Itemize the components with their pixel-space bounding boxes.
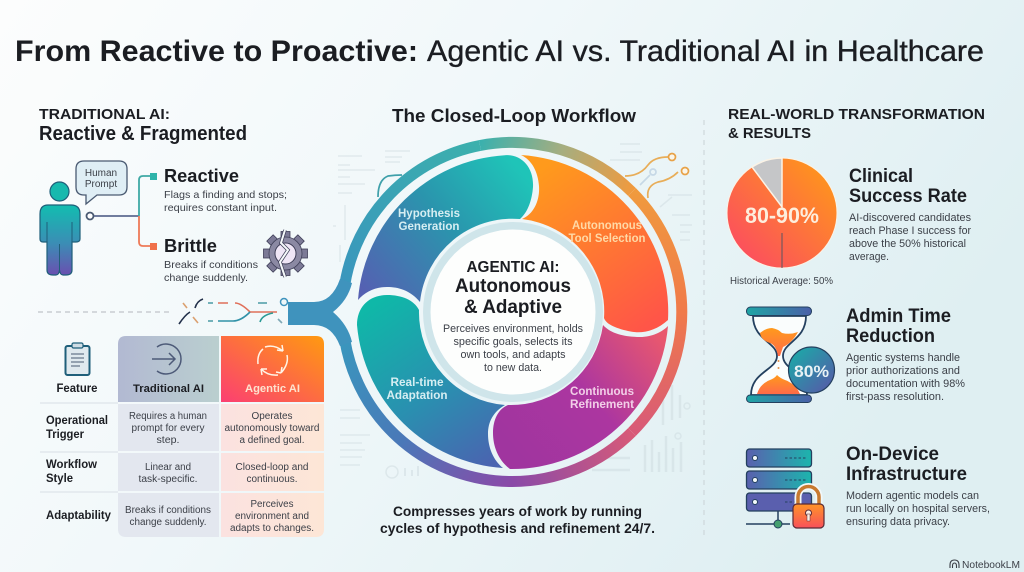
row: adaptability: adapts to changes. — [230, 523, 314, 534]
watermark: NotebookLM: NotebookLM — [962, 560, 1020, 571]
heading: real-world results — [728, 106, 985, 142]
row: adaptability: environment and — [235, 511, 309, 522]
row: operational trigger: Operates — [252, 411, 292, 422]
chart: clinical success pie — [727, 158, 837, 287]
center hub: own tools, and adapts — [460, 349, 566, 361]
text block: on-device infrastructure: Modern agentic models can — [846, 490, 979, 502]
icon: hourglass with 80% badge — [746, 307, 834, 402]
text block: clinical success rate: Clinical — [849, 166, 913, 187]
icon: broken gear — [264, 230, 308, 277]
callout: human prompt bubble: Human — [85, 168, 117, 179]
row: operational trigger: step. — [156, 435, 180, 446]
icon: person — [40, 182, 80, 275]
text block: admin time reduction: documentation with 98% — [846, 378, 965, 390]
segment: real-time adaptation: Real-time — [390, 377, 444, 389]
fragmented wires — [38, 299, 282, 324]
row: workflow style: task-specific. — [138, 474, 198, 485]
row: workflow style — [46, 453, 324, 491]
segment: continuous refinement — [493, 325, 668, 469]
header: agentic AI: Agentic AI — [245, 383, 300, 395]
text block: admin time reduction: prior authorizations and — [846, 365, 960, 377]
heading: real-world results: REAL-WORLD TRANSFORMATION — [728, 106, 985, 123]
row: operational trigger: Requires a human — [129, 411, 207, 422]
icon: server rack with lock — [746, 449, 824, 528]
outer ring — [345, 142, 682, 482]
text block: clinical success rate: Success Rate — [849, 186, 967, 207]
title: From Reactive to Proactive: — [15, 35, 418, 68]
segment: autonomous tool selection — [521, 155, 668, 332]
text block: brittle: Brittle — [164, 236, 217, 256]
text block: clinical success rate: reach Phase I success for — [849, 225, 971, 237]
gold circuit wires — [378, 154, 688, 198]
row: workflow style: continuous. — [246, 474, 298, 485]
title — [15, 35, 984, 68]
center hub: & Adaptive — [464, 296, 562, 318]
chart: clinical success pie: Historical Average: 50% — [730, 276, 833, 287]
header: feature: Feature — [56, 383, 98, 395]
caption: compresses years: Compresses years of work by running — [393, 503, 642, 519]
panel: closed-loop workflow — [280, 105, 692, 536]
text block: on-device infrastructure: Infrastructure — [846, 464, 967, 485]
caption: compresses years — [380, 503, 655, 536]
caption: compresses years: cycles of hypothesis and refinement 24/7. — [380, 520, 655, 536]
panel: comparison table — [40, 336, 324, 537]
header: traditional AI — [118, 336, 219, 402]
text block: reactive: Flags a finding and stops; — [164, 189, 287, 201]
row: workflow style: Linear and — [145, 462, 191, 473]
row: adaptability — [46, 493, 324, 537]
heading: traditional AI — [39, 106, 247, 145]
row: workflow style: Closed-loop and — [236, 462, 308, 473]
center hub — [423, 222, 603, 402]
row: adaptability: Breaks if conditions — [125, 505, 211, 516]
segment: hypothesis generation: Generation — [398, 221, 460, 233]
segment: real-time adaptation: Adaptation — [386, 390, 448, 402]
row: workflow style: Workflow — [46, 459, 97, 471]
center hub: AGENTIC AI: — [466, 259, 560, 276]
row: adaptability: Adaptability — [46, 510, 112, 522]
heading: traditional AI: TRADITIONAL AI: — [39, 106, 170, 123]
text block: reactive: Reactive — [164, 166, 239, 186]
title: Agentic AI vs. Traditional AI in Healthcare — [427, 35, 984, 68]
text block: clinical success rate: above the 50% historical — [849, 238, 966, 250]
segment: autonomous tool selection: Autonomous — [572, 220, 642, 232]
segment: hypothesis generation: Hypothesis — [398, 208, 460, 220]
segment: continuous refinement: Refinement — [570, 399, 634, 411]
callout: human prompt bubble: Prompt — [85, 179, 117, 190]
icon: hourglass with 80% badge: 80% — [794, 362, 829, 381]
row: operational trigger: Trigger — [46, 429, 85, 441]
text block: reactive: requires constant input. — [164, 202, 277, 214]
icon: clipboard — [66, 343, 90, 375]
header: agentic AI — [221, 336, 324, 402]
chart: clinical success pie: 80-90% — [745, 203, 819, 228]
segment: hypothesis generation — [358, 155, 533, 302]
text block: admin time reduction: Admin Time — [846, 306, 951, 327]
center hub: Autonomous — [455, 275, 571, 297]
loop connector — [280, 279, 352, 346]
text block: clinical success rate — [849, 166, 971, 263]
heading: real-world results: & RESULTS — [728, 125, 811, 142]
header: traditional AI: Traditional AI — [133, 383, 204, 395]
row: operational trigger: Operational — [46, 415, 108, 427]
segment: real-time adaptation — [357, 295, 505, 468]
text block: on-device infrastructure: On-Device — [846, 444, 939, 465]
heading: traditional AI: Reactive & Fragmented — [39, 123, 247, 145]
text block: on-device infrastructure — [846, 444, 990, 528]
row: operational trigger — [46, 404, 324, 451]
text block: admin time reduction: Agentic systems handle — [846, 352, 960, 364]
text block: admin time reduction: Reduction — [846, 326, 935, 347]
text block: admin time reduction — [846, 306, 965, 403]
panel: real-world results — [727, 106, 990, 528]
text block: admin time reduction: first-pass resolution. — [846, 391, 944, 403]
row: operational trigger: a defined goal. — [240, 435, 304, 446]
text block: clinical success rate: average. — [849, 251, 889, 263]
text block: brittle: Breaks if conditions — [164, 259, 258, 271]
center hub: to new data. — [484, 362, 542, 374]
row: adaptability: Perceives — [250, 499, 294, 510]
text block: brittle — [164, 236, 258, 284]
row: operational trigger: autonomously toward — [224, 423, 320, 434]
center hub: specific goals, selects its — [454, 336, 573, 348]
segment: continuous refinement: Continuous — [570, 386, 634, 398]
center hub: Perceives environment, holds — [443, 323, 583, 335]
segment: autonomous tool selection: Tool Selection — [568, 233, 646, 245]
text block: reactive — [164, 166, 287, 214]
panel: traditional AI — [38, 106, 308, 324]
text block: on-device infrastructure: run locally on hospital servers, — [846, 503, 990, 515]
callout: human prompt bubble — [76, 161, 127, 204]
text block: brittle: change suddenly. — [164, 272, 248, 284]
row: operational trigger: prompt for every — [132, 423, 204, 434]
row: adaptability: change suddenly. — [130, 517, 206, 528]
text block: on-device infrastructure: ensuring data privacy. — [846, 516, 950, 528]
heading: closed-loop workflow: The Closed-Loop Workflow — [392, 105, 637, 126]
branching connector — [86, 173, 157, 250]
text block: clinical success rate: AI-discovered candidates — [849, 212, 971, 224]
row: workflow style: Style — [46, 473, 73, 485]
